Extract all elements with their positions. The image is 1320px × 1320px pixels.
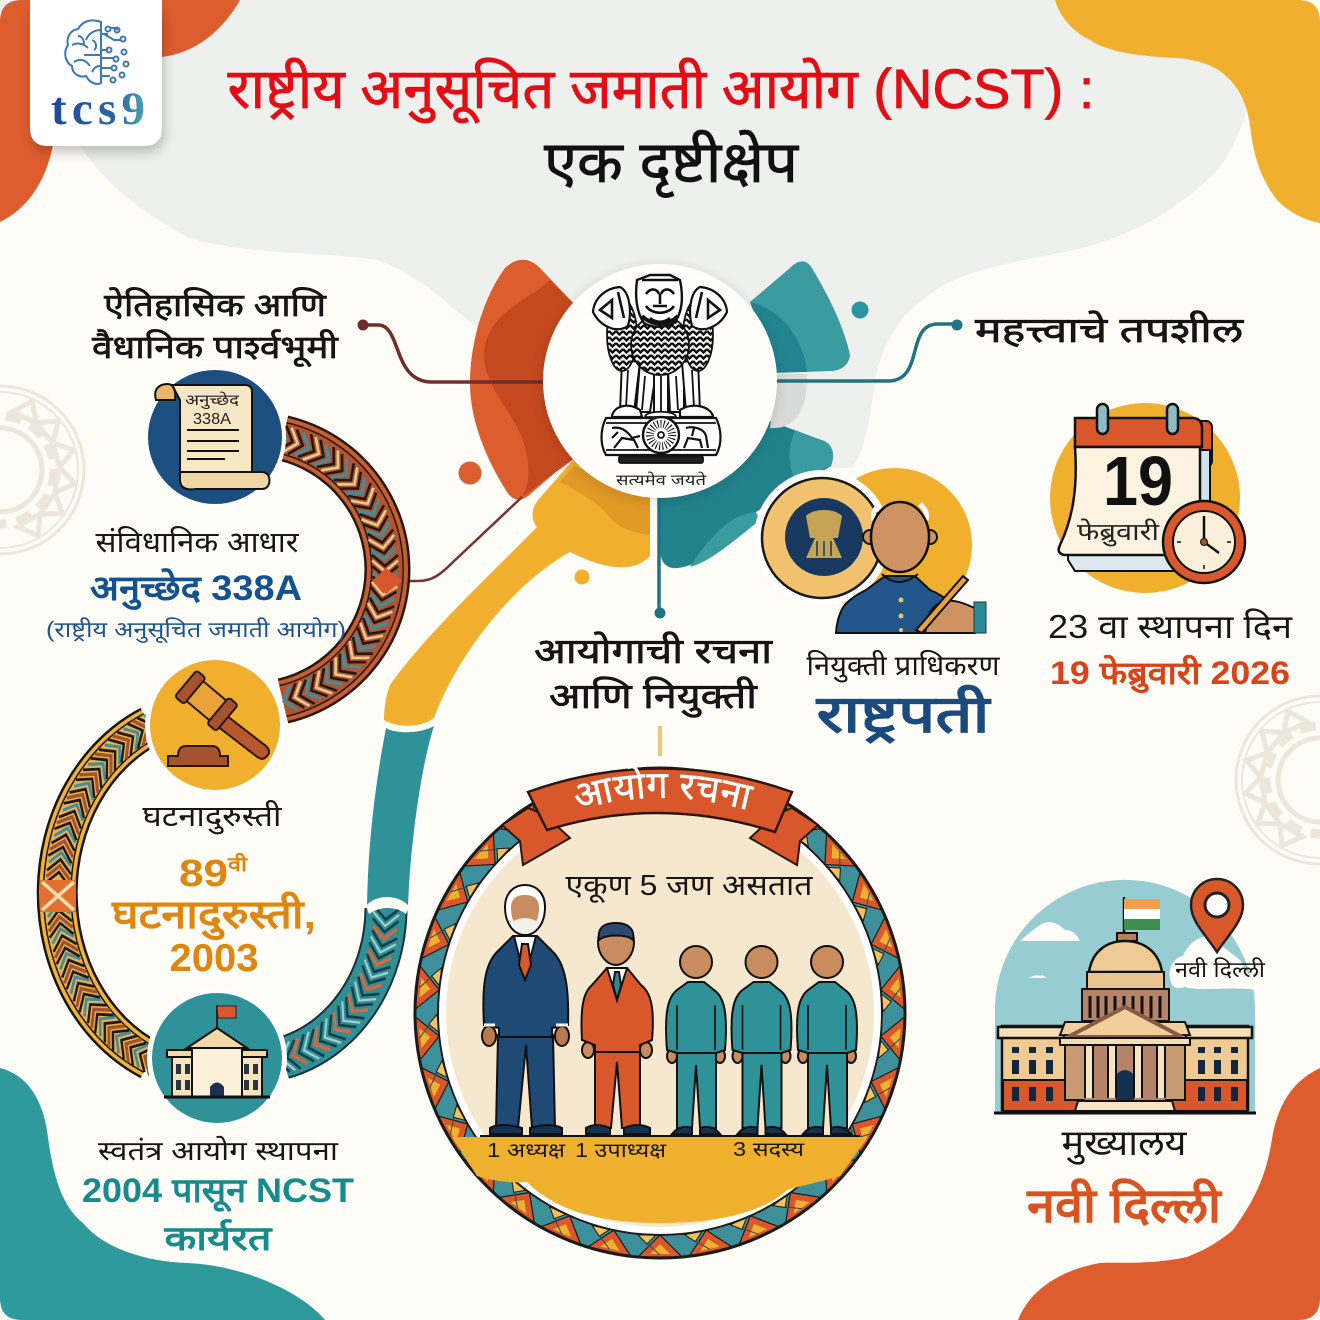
panel: composition ring (414, 765, 906, 1260)
role labels: 1 उपाध्यक्ष (575, 1140, 667, 1162)
hub circle with emblem (542, 264, 778, 502)
icon: headquarters building (994, 879, 1265, 1113)
heading: key details: महत्त्वाचे तपशील (975, 310, 1244, 350)
value: amendment 2003: घटनादुरुस्ती, (111, 891, 316, 941)
block: appointing authority: नियुक्ती प्राधिकरण (806, 649, 1000, 683)
connector: yellow tick (658, 726, 662, 756)
logo wordmark: tcs9 (51, 83, 145, 135)
corner: top left orange (0, 0, 240, 222)
petal: teal top (750, 261, 850, 373)
value: date: 19 फेब्रुवारी 2026 (1050, 654, 1290, 694)
faint mandala left (0, 386, 84, 554)
icon: commission building (147, 988, 287, 1128)
heading: composition and appointment: आयोगाची रचना (534, 631, 773, 671)
dome (1117, 933, 1137, 941)
value: 89th: वी (227, 852, 248, 876)
role labels: 3 सदस्य (733, 1139, 804, 1161)
ribbon title: आयोग रचना (574, 765, 754, 810)
portico (1065, 1040, 1185, 1100)
icon: scroll article (144, 366, 286, 508)
corner: top right yellow (1055, 0, 1320, 223)
head (863, 530, 877, 544)
block: constitutional basis: संविधानिक आधार (96, 526, 300, 559)
wings (1002, 1026, 1248, 1110)
icon: scroll article: 338A (193, 411, 231, 428)
emblem motto: सत्यमेव जयते (616, 471, 707, 489)
title: राष्ट्रीय अनुसूचित जमाती आयोग (NCST) : (228, 57, 1094, 124)
arc knot (40, 880, 76, 912)
connector: details (775, 320, 962, 381)
block: constitutional basis (46, 526, 346, 644)
abacus (602, 418, 720, 455)
value: president: राष्ट्रपती (815, 684, 993, 744)
connector: composition (654, 490, 666, 618)
dot: yellow (574, 570, 590, 584)
arc: yellow pattern (46, 709, 165, 1078)
role labels: 1 अध्यक्ष (487, 1140, 566, 1162)
legs (620, 360, 700, 415)
petal: yellow arm (384, 460, 650, 726)
block: appointing authority (806, 649, 1000, 744)
ribbon band (500, 765, 820, 867)
value: article: अनुच्छेद 338A (90, 568, 302, 610)
connector: history (358, 320, 545, 382)
heading: composition and appointment (534, 631, 773, 718)
faint mandala right (1236, 696, 1320, 864)
flag (1123, 897, 1125, 935)
clock (1163, 501, 1245, 583)
composition heading: एकूण 5 जण असतात (566, 870, 813, 903)
figure: vice chairperson (581, 923, 653, 1134)
value: amendment 2003: 2003 (170, 937, 258, 980)
ring border (415, 768, 905, 1258)
heading: history (92, 287, 339, 367)
figure: member 3 (797, 946, 857, 1134)
mini emblem (806, 510, 842, 558)
logo card (30, 0, 164, 152)
block: foundation day: 23 वा स्थापना दिन (1048, 608, 1293, 645)
band: teal connector (367, 726, 434, 906)
figure: member 1 (666, 946, 726, 1134)
icon: map pin (1191, 879, 1243, 952)
icon: brain circuit (65, 20, 128, 84)
manes (607, 299, 637, 371)
arc: brown pattern (256, 422, 402, 714)
petal: orange (470, 260, 575, 499)
figure: member 2 (732, 946, 791, 1134)
block: headquarters (1026, 1122, 1223, 1233)
grey header blob (0, 0, 1250, 470)
figure: chairperson (482, 885, 569, 1134)
grey shadow beside hub (770, 374, 807, 428)
value: 2004 NCST: कार्यरत (163, 1218, 273, 1258)
connector: arc to hub (405, 497, 522, 581)
dot: teal (852, 302, 868, 318)
role labels (487, 1139, 804, 1162)
lion heads (593, 287, 630, 329)
hand and pen (925, 601, 975, 633)
note: commission name: (राष्ट्रीय अनुसूचित जमाती आयोग) (46, 617, 346, 644)
value: 89th: 89 (179, 853, 221, 895)
icon: national emblem (593, 275, 727, 463)
heading: history: ऐतिहासिक आणि (104, 287, 327, 323)
body (836, 576, 965, 633)
hub petals (367, 260, 850, 906)
title (228, 57, 1094, 198)
value: new delhi: नवी दिल्ली (1026, 1178, 1223, 1233)
icon: gavel (145, 655, 285, 795)
heading: history: वैधानिक पार्श्वभूमी (92, 329, 339, 367)
block: amendment: घटनादुरुस्ती (142, 800, 282, 835)
calendar month: फेब्रुवारी (1077, 518, 1160, 547)
band end cap (366, 897, 409, 914)
paws (612, 406, 713, 417)
base ribbon (452, 1137, 868, 1223)
calendar date: 19 (1103, 442, 1173, 520)
corner: bottom right orange (1018, 1068, 1320, 1320)
dot: orange (458, 462, 482, 484)
pin label: नवी दिल्ली (1175, 957, 1265, 982)
corner: bottom left teal (0, 1068, 325, 1320)
value: 2004 NCST (82, 1172, 354, 1258)
arc: teal pattern (267, 906, 400, 1076)
value: 2004 NCST: 2004 पासून NCST (82, 1172, 354, 1213)
block: foundation day (1048, 608, 1293, 694)
block: amendment (111, 800, 316, 980)
block: independent commission (82, 1135, 354, 1258)
icon: president (754, 468, 986, 633)
icon: calendar (1050, 403, 1245, 593)
petal: teal lower (660, 421, 833, 568)
subtitle: एक दृष्टीक्षेप (544, 130, 799, 198)
icon: scroll article: अनुच्छेद (185, 391, 240, 410)
value: amendment 2003 (111, 891, 316, 980)
heading: composition and appointment: आणि नियुक्ती (549, 676, 758, 718)
block: independent commission: स्वतंत्र आयोग स्थापना (98, 1135, 339, 1166)
block: headquarters: मुख्यालय (1062, 1122, 1188, 1165)
